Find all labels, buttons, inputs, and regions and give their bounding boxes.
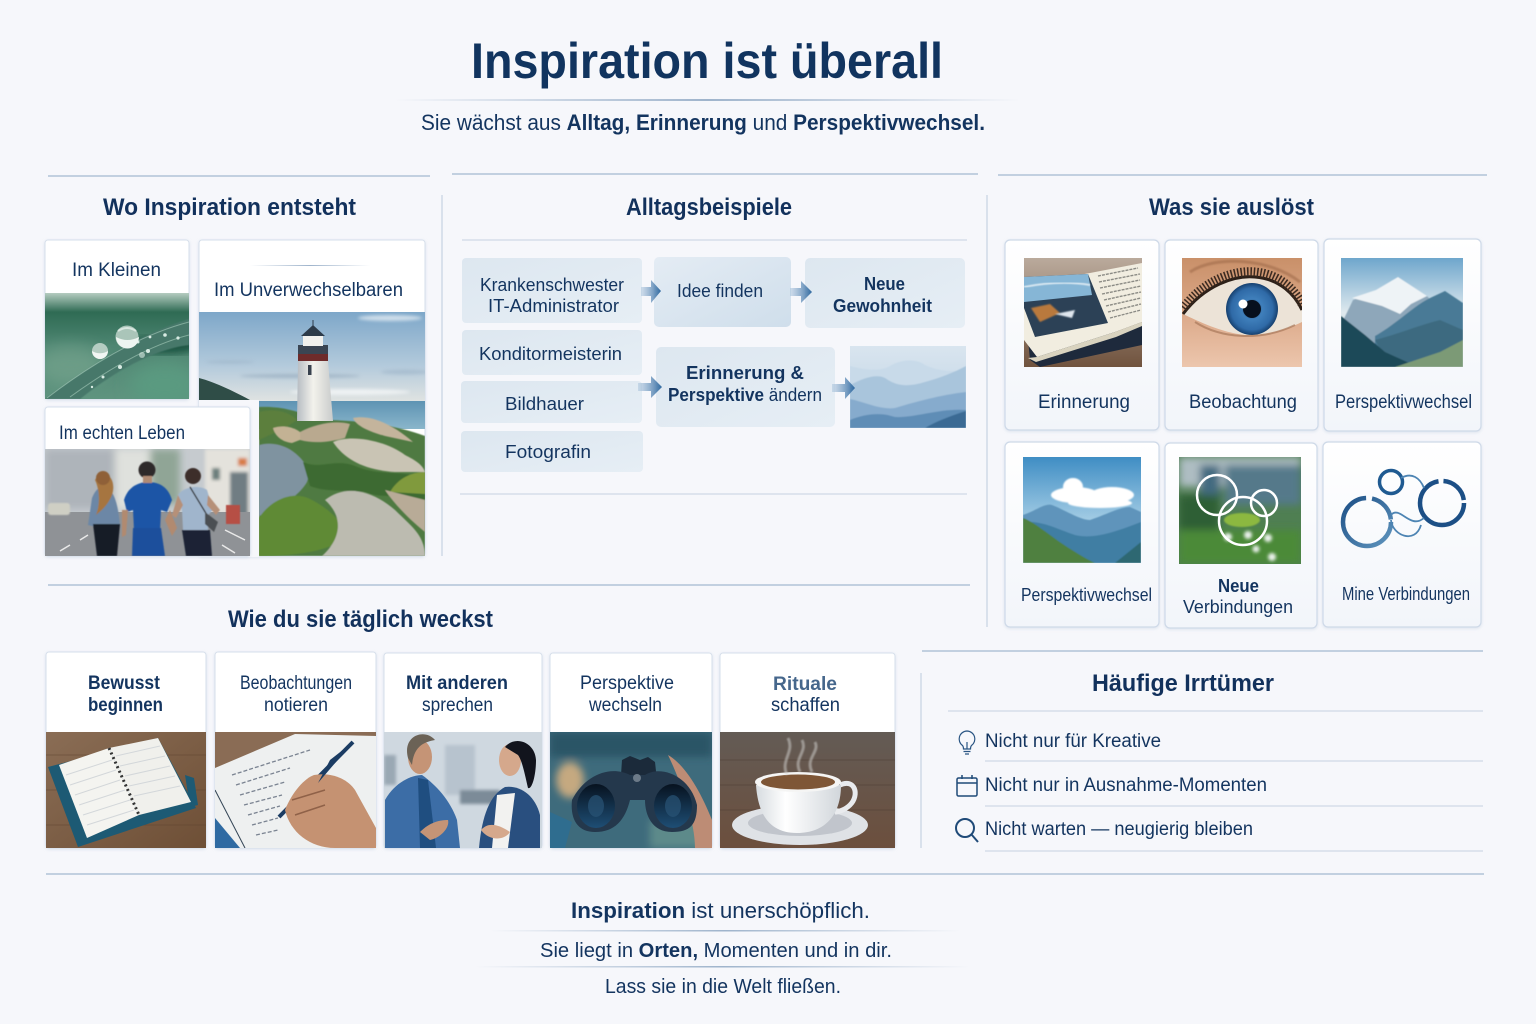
photo: spiral notebook	[46, 732, 206, 848]
box: Krankenschwester, IT-Administrator	[462, 258, 642, 323]
subtitle: Sie wächst aus Alltag, Erinnerung und Perspektivwechsel.	[421, 110, 985, 135]
person: woman left	[88, 471, 120, 556]
card: Neue Verbindungen: Verbindungen	[1183, 597, 1293, 617]
photo: hand writing notes	[215, 732, 376, 848]
card: Mine Verbindungen: Mine Verbindungen	[1342, 584, 1470, 604]
box: Neue Gewohnheit: Neue	[864, 274, 905, 294]
heading: Was sie auslöst: Was sie auslöst	[1149, 194, 1314, 221]
panel: Wo Inspiration entsteht	[35, 194, 429, 557]
card: Rituale schaffen: Rituale	[773, 674, 837, 695]
card: Im Unverwechselbaren: Im Unverwechselbaren	[214, 280, 403, 301]
person: person with grey shirt and bag	[172, 468, 220, 556]
arrow	[790, 281, 812, 303]
box: Bildhauer: Bildhauer	[505, 394, 584, 414]
photo: blue mountains with clouds	[1023, 457, 1141, 563]
photo: snowy mountain	[1341, 258, 1463, 367]
card: Perspektivwechsel 2: Perspektivwechsel	[1021, 585, 1152, 605]
closing statement: Lass sie in die Welt fließen.	[605, 976, 841, 998]
text: Nicht warten – neugierig bleiben: Nicht warten — neugierig bleiben	[985, 819, 1253, 840]
box: Erinnerung und Perspektive ändern: Erinnerung &	[686, 363, 804, 383]
arrow	[641, 280, 661, 303]
title: Inspiration ist überall	[471, 33, 943, 89]
icon: magnifying glass	[956, 819, 978, 842]
card: Beobachtungen notieren	[215, 652, 376, 848]
card: Erinnerung	[1005, 240, 1159, 430]
card: Bewusst beginnen: Bewusst	[88, 673, 161, 694]
box: Erinnerung und Perspektive ändern	[656, 347, 835, 427]
photo: lighthouse on rocky coast	[199, 312, 425, 556]
card: Beobachtungen notieren: Beobachtungen	[240, 673, 352, 694]
card: Im Kleinen	[35, 240, 200, 407]
card: Perspektivwechsel: Perspektivwechsel	[1335, 392, 1472, 413]
box: Konditormeisterin: Konditormeisterin	[479, 344, 622, 364]
text: Nicht nur für Kreative: Nicht nur für Kreative	[985, 731, 1161, 752]
panel: Was sie auslöst	[1005, 194, 1481, 628]
card: Perspektivwechsel	[1324, 239, 1481, 431]
card: Perspektive wechseln: wechseln	[588, 695, 662, 716]
box: Erinnerung und Perspektive ändern: Perspektive ändern	[668, 385, 822, 405]
photo: water droplets on leaf	[45, 293, 189, 399]
box: Krankenschwester, IT-Administrator: Krankenschwester	[480, 275, 624, 295]
card: Mit anderen sprechen	[384, 653, 542, 848]
box: Neue Gewohnheit	[805, 258, 965, 328]
box: Idee finden	[654, 257, 791, 327]
photo: two people talking	[384, 732, 542, 848]
panel: Alltagsbeispiele	[461, 194, 966, 472]
icon: light bulb	[959, 731, 975, 754]
photo: people walking in the street	[45, 449, 250, 556]
card: Mit anderen sprechen: sprechen	[422, 695, 493, 716]
card: Perspektive wechseln	[550, 653, 712, 848]
photo: cup of coffee	[720, 732, 895, 848]
box: Idee finden: Idee finden	[677, 281, 763, 301]
closing statement: Inspiration ist unerschöpflich.	[571, 898, 870, 923]
card: Rituale schaffen	[720, 653, 895, 848]
heading: Häufige Irrtümer: Häufige Irrtümer	[1092, 670, 1274, 697]
photo: rings over green landscape	[1179, 457, 1301, 564]
closing statement: Sie liegt in Orten, Momenten und in dir.	[540, 940, 892, 962]
icon: connected rings	[1343, 470, 1464, 546]
box: Krankenschwester, IT-Administrator: IT-Administrator	[488, 296, 619, 316]
heading: Wie du sie täglich weckst: Wie du sie täglich weckst	[228, 606, 493, 633]
card: Im echten Leben: Im echten Leben	[59, 423, 185, 444]
image: misty blue mountains	[850, 346, 966, 428]
box: Bildhauer	[461, 381, 642, 423]
person: man in blue shirt	[122, 462, 177, 556]
card: Neue Verbindungen: Neue	[1218, 576, 1259, 596]
heading: Alltagsbeispiele: Alltagsbeispiele	[626, 194, 792, 221]
card: Perspektivwechsel 2	[1005, 442, 1159, 627]
card: Im Kleinen: Im Kleinen	[72, 260, 161, 281]
card: Im Unverwechselbaren	[199, 240, 429, 556]
card: Mine Verbindungen	[1323, 442, 1481, 627]
arrow	[832, 377, 855, 399]
card: Bewusst beginnen	[46, 652, 206, 848]
heading: Wo Inspiration entsteht: Wo Inspiration entsteht	[103, 194, 356, 221]
panel: Häufige Irrtümer	[956, 670, 1274, 842]
card: Erinnerung: Erinnerung	[1038, 392, 1130, 413]
photo: blue eye	[1182, 258, 1302, 367]
photo: binoculars held in hands	[550, 732, 712, 848]
arrow	[638, 376, 662, 398]
person: woman in blue jacket	[479, 741, 540, 848]
box: Neue Gewohnheit: Gewohnheit	[833, 296, 932, 316]
card: Beobachtungen notieren: notieren	[264, 695, 328, 716]
closing statement	[475, 898, 970, 998]
text: Nicht nur in Ausnahme-Momenten: Nicht nur in Ausnahme-Momenten	[985, 775, 1267, 796]
photo: open book	[1024, 258, 1142, 367]
person: man in blue jacket	[385, 734, 460, 848]
icon: lighthouse tower	[297, 320, 333, 421]
card: Beobachtung	[1165, 240, 1318, 430]
card: Rituale schaffen: schaffen	[771, 695, 840, 716]
card: Perspektive wechseln: Perspektive	[580, 673, 674, 694]
card: Beobachtung: Beobachtung	[1189, 392, 1297, 413]
box: Konditormeisterin	[462, 330, 642, 375]
card: Mit anderen sprechen: Mit anderen	[406, 673, 508, 694]
card: Im echten Leben	[45, 407, 250, 556]
icon: calendar	[957, 775, 977, 796]
card: Bewusst beginnen: beginnen	[88, 695, 163, 716]
panel: Wie du sie täglich weckst	[46, 606, 895, 848]
box: Fotografin	[461, 431, 643, 472]
box: Fotografin: Fotografin	[505, 442, 591, 462]
card: Neue Verbindungen	[1165, 443, 1317, 628]
